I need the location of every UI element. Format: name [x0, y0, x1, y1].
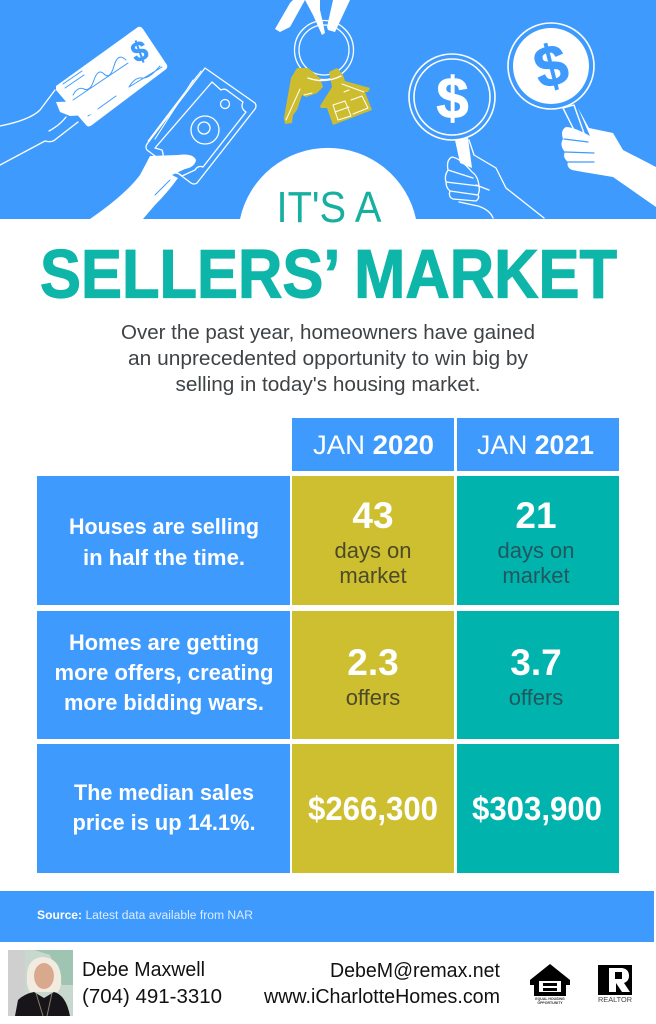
agent name and phone	[82, 959, 222, 1008]
icon: hand holding banknotes	[90, 68, 256, 219]
icon: realtor logo	[598, 965, 632, 1004]
row 1: days on market: days on	[497, 538, 575, 563]
row 2: offers: offers	[346, 685, 400, 710]
column header: Jan 2021: JAN 2021	[477, 430, 594, 460]
row 2: offers: 3.7	[510, 642, 562, 683]
agent portrait	[8, 950, 73, 1016]
column header: Jan 2021	[457, 418, 619, 471]
column header: Jan 2020	[292, 418, 454, 471]
row 1: days on market: days on	[334, 538, 412, 563]
icon: realtor logo: REALTOR	[598, 997, 632, 1004]
agent name and phone: Debe Maxwell	[82, 959, 205, 981]
icon: equal housing opportunity: OPPORTUNITY	[537, 1001, 563, 1005]
icon: hand holding keyring	[275, 0, 372, 125]
icon: hand holding outlined paddle	[409, 54, 544, 218]
icon: gold house tag	[320, 68, 372, 125]
row 1: days on market: market	[339, 563, 407, 588]
row 1: days on market: Houses are selling	[69, 514, 259, 539]
row 1: days on market	[37, 476, 619, 605]
agent name and phone: (704) 491-3310	[82, 986, 222, 1008]
row 1: days on market: in half the time.	[83, 545, 245, 570]
row 2: offers	[37, 611, 619, 739]
row 3: median sales price: $303,900	[472, 790, 602, 827]
row 3: median sales price: price is up 14.1%.	[72, 810, 256, 835]
row 3: median sales price: The median sales	[74, 780, 254, 805]
icon: hand holding outlined paddle: $	[436, 66, 469, 131]
header banner	[0, 0, 656, 219]
intro paragraph	[121, 321, 535, 396]
row 2: offers: more bidding wars.	[64, 690, 264, 715]
row 3: median sales price: $266,300	[308, 790, 438, 827]
agent email and website: www.iCharlotteHomes.com	[263, 986, 500, 1008]
icon: hand holding check: $	[127, 34, 153, 69]
row 2: offers: 2.3	[347, 642, 399, 683]
row 2: offers: Homes are getting	[69, 630, 259, 655]
source band	[0, 891, 654, 942]
column header: Jan 2020: JAN 2020	[313, 430, 434, 460]
icon: gold key	[284, 68, 323, 124]
icon: equal housing opportunity	[530, 964, 570, 1005]
icon: hand holding white paddle	[508, 23, 656, 207]
agent email and website	[263, 960, 500, 1008]
white semicircle	[240, 148, 416, 219]
comparison table	[37, 418, 619, 873]
intro paragraph: selling in today's housing market.	[176, 373, 481, 396]
row 2: offers: more offers, creating	[54, 660, 274, 685]
intro paragraph: Over the past year, homeowners have gained	[121, 321, 535, 344]
agent email and website: DebeM@remax.net	[330, 960, 500, 982]
source band: Source: Latest data available from NAR	[37, 910, 253, 922]
title: it's a: IT'S A	[276, 183, 382, 232]
row 1: days on market: 21	[515, 495, 557, 536]
row 1: days on market: 43	[352, 495, 394, 536]
icon: hand holding check	[0, 27, 167, 165]
icon: equal housing opportunity: EQUAL HOUSING	[535, 997, 565, 1001]
row 2: offers: offers	[509, 685, 563, 710]
row 1: days on market: market	[502, 563, 570, 588]
icon: hand holding white paddle: $	[528, 31, 575, 102]
row 3: median sales price	[37, 744, 619, 873]
intro paragraph: an unprecedented opportunity to win big by	[128, 347, 529, 370]
